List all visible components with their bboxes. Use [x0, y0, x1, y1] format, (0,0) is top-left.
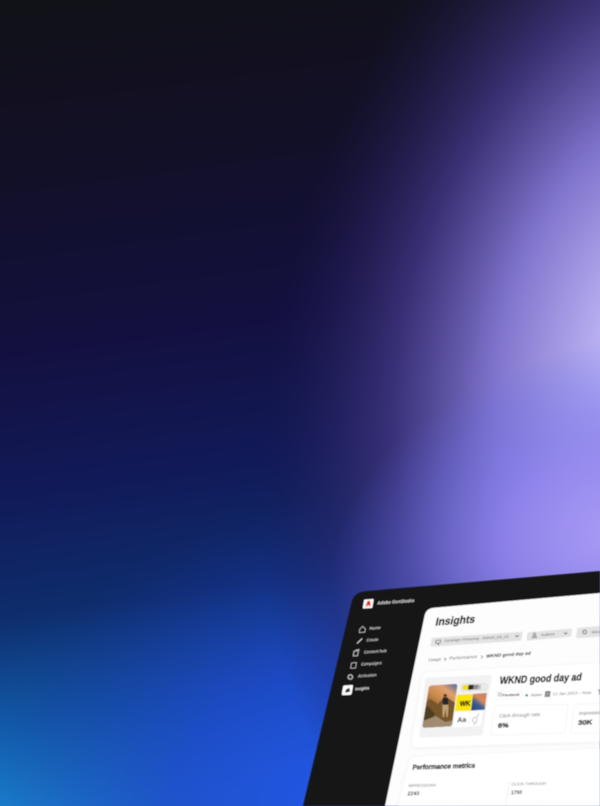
metric: click-through	[510, 782, 547, 796]
metric: click-through: 1750	[510, 790, 522, 796]
breadcrumb	[428, 651, 532, 662]
panel: performance metrics	[398, 748, 600, 806]
nav: activation: Activation	[358, 672, 377, 678]
metric: click-through: CLICK-THROUGH	[511, 782, 547, 786]
status dot	[525, 694, 528, 697]
breadcrumb: Performance	[449, 654, 478, 661]
heading: Insights: Insights	[434, 614, 476, 629]
tile: sunset image	[471, 693, 487, 710]
metric card: click-through rate: 6%	[498, 722, 509, 730]
tile: brush sketch	[469, 711, 483, 727]
panel: main content	[385, 593, 600, 806]
metric: impressions: IMPRESSIONS	[408, 783, 437, 788]
sidebar navigation	[342, 625, 387, 695]
chip: status	[576, 626, 600, 638]
chip: campaign	[431, 632, 523, 647]
tile: typography: Aa	[457, 717, 467, 724]
ad meta row	[496, 689, 600, 699]
metric card: click-through rate	[491, 704, 568, 735]
nav: content hub: Content hub	[364, 648, 387, 655]
chip: audience: Audience	[541, 632, 555, 637]
channel chip: Facebook	[502, 693, 521, 697]
tile: WK yellow logo: WK	[459, 701, 471, 708]
chip: audience	[527, 628, 572, 641]
breadcrumb: WKND good day ad	[486, 651, 532, 659]
chip: campaign: Campaign: Photoshop - Refresh_EN_US	[444, 635, 510, 643]
status text: Active	[531, 692, 542, 697]
app window mockup	[303, 571, 600, 806]
metric card: click-through rate: Click-through rate	[499, 712, 541, 720]
nav: home: Home	[369, 625, 382, 631]
breadcrumb: Usage	[428, 656, 442, 662]
nav: create: Create	[366, 637, 380, 643]
nav: campaigns: Campaigns	[361, 660, 383, 667]
metric card: impressions: 30K	[577, 719, 593, 727]
icon: calendar	[545, 691, 550, 697]
panel: ad summary card	[420, 663, 600, 742]
photo: hiker on mountain	[422, 684, 458, 728]
ad title: WKND good day ad	[499, 671, 583, 687]
metric: impressions: 2243	[407, 791, 420, 797]
logo: Adobe GenStudio	[363, 598, 415, 608]
color palette pill	[461, 683, 488, 691]
panel: dark sidebar window	[303, 571, 600, 806]
metric card: impressions	[571, 703, 600, 733]
icon: Adobe logo	[363, 599, 374, 608]
brand name: Adobe GenStudio	[377, 598, 415, 607]
section heading: Performance metrics	[412, 763, 476, 772]
nav: insights selected: Insights	[355, 685, 370, 691]
asset thumbnail group	[419, 675, 492, 738]
date range: 12 Jan 2023 – Now	[552, 690, 592, 696]
filter chips	[431, 626, 600, 647]
metric: impressions	[407, 783, 437, 797]
